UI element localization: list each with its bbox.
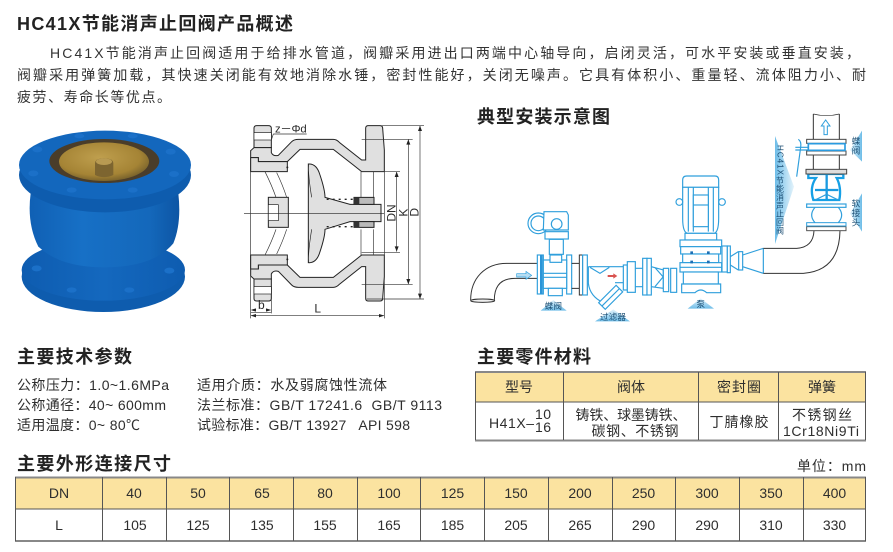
materials table: 碳钢、不锈钢 (592, 423, 678, 439)
values row (55, 517, 846, 533)
materials table: H41X– (489, 415, 534, 431)
component labels: 接 (852, 207, 861, 218)
technical parameters text: 适用温度：0~ 80℃ (17, 417, 140, 433)
component labels: 头 (852, 217, 861, 227)
materials table: 丁腈橡胶 (710, 414, 768, 430)
materials table: 弹簧 (808, 379, 836, 395)
values row: 125 (186, 517, 210, 533)
header row: 50 (190, 485, 206, 501)
values row: 135 (250, 517, 274, 533)
technical parameters text: 适用介质：水及弱腐蚀性流体 (197, 377, 387, 393)
header row: 300 (695, 485, 719, 501)
materials table: 阀体 (617, 379, 645, 395)
component labels: 蝶阀 (545, 300, 562, 311)
dimension labels: K (396, 209, 410, 217)
materials table: 1Cr18Ni9Ti (783, 423, 859, 439)
header row: 80 (317, 485, 333, 501)
values row: 310 (759, 517, 783, 533)
component labels: 泵 (696, 299, 705, 309)
label backgrounds (541, 131, 862, 321)
component labels: 回 (776, 218, 784, 227)
dimensions table (15, 477, 866, 541)
header row: 400 (823, 485, 846, 501)
materials table: 16 (535, 419, 551, 435)
component labels: 阀 (852, 145, 860, 155)
connecting spool and strainer (572, 255, 677, 309)
materials table: 密封圈 (717, 379, 761, 395)
unit note: 单位：mm (797, 458, 866, 474)
vertical run: joint, check valve, butterfly valve, pipe (795, 114, 847, 231)
intro paragraph: HC41X节能消声止回阀适用于给排水管道，阀瓣采用进出口两端中心轴导向，启闭灵活，可水平安装或垂直安装， (50, 45, 860, 61)
hub and shaft (268, 197, 288, 227)
heading: main technical parameters: 主要技术参数 (17, 346, 132, 367)
component labels: 过滤器 (600, 311, 626, 322)
component labels: 阀 (776, 226, 784, 235)
dimension labels: DN (384, 204, 398, 222)
intro paragraph: 疲劳、寿命长等优点。 (17, 89, 171, 105)
technical parameters text: 试验标准：GB/T 13927 API 598 (197, 417, 410, 433)
dimension labels: L (314, 302, 321, 316)
butterfly valve with actuator (528, 212, 572, 296)
valve product photo (19, 131, 191, 312)
body halves (251, 126, 384, 197)
technical parameters text (17, 377, 442, 433)
values row: 290 (632, 517, 655, 533)
header row: 65 (254, 485, 270, 501)
technical parameters text: 公称通径：40~ 600mm (17, 397, 166, 413)
header row: DN (49, 485, 69, 501)
values row: 165 (377, 517, 401, 533)
header row: 100 (377, 485, 401, 501)
component labels: 软 (852, 198, 861, 209)
materials table (475, 372, 866, 440)
intro paragraph (17, 45, 866, 105)
dimension labels: D (408, 208, 422, 217)
vertical pump with motor (676, 176, 725, 293)
component labels: 止 (776, 209, 784, 219)
values row: L (55, 517, 63, 533)
component labels (545, 135, 861, 322)
component labels: 能 (776, 184, 784, 194)
title: HC41X节能消声止回阀产品概述 (17, 13, 293, 34)
values row: 265 (568, 517, 592, 533)
technical parameters text: 法兰标准：GB/T 17241.6 GB/T 9113 (197, 397, 442, 413)
header row: 200 (568, 485, 592, 501)
header row: 40 (126, 485, 142, 501)
component labels: 蝶 (852, 135, 861, 146)
technical parameters text: 公称压力：1.0~1.6MPa (17, 377, 169, 393)
installation schematic (471, 114, 862, 322)
materials table: 10 (535, 406, 551, 422)
intro paragraph: 阀瓣采用弹簧加载，其快速关闭能有效地消除水锤，密封性能好，关闭无噪声。它具有体积小、重量轻、流体阻力小、耐 (17, 67, 866, 83)
values row: 155 (313, 517, 337, 533)
heading: typical installation: 典型安装示意图 (477, 106, 610, 127)
component labels: 消 (776, 192, 784, 202)
header row: 350 (759, 485, 783, 501)
dimension labels (258, 123, 422, 316)
heading: main dimensions: 主要外形连接尺寸 (17, 454, 171, 474)
outlet reducer and elbow (722, 231, 840, 273)
dimension labels: b (258, 298, 265, 312)
values row: 330 (823, 517, 846, 533)
component labels: HC41X (775, 145, 784, 176)
values row: 205 (504, 517, 528, 533)
values row: 290 (695, 517, 719, 533)
header row (49, 485, 846, 501)
dimension lines (251, 126, 424, 318)
values row: 185 (441, 517, 464, 533)
materials table: 铸铁、球墨铸铁、 (576, 407, 686, 423)
header row: 150 (504, 485, 528, 501)
header row: 250 (632, 485, 655, 501)
dimension labels: z－Φd (275, 123, 307, 135)
heading: main parts materials: 主要零件材料 (477, 347, 591, 367)
header row: 125 (441, 485, 464, 501)
materials table: 不锈钢丝 (792, 407, 852, 423)
valve cross-section drawing (244, 123, 424, 318)
materials table: 型号 (505, 379, 533, 395)
inlet elbow pipe (471, 263, 537, 302)
component labels: 节 (776, 176, 784, 185)
values row: 105 (123, 517, 147, 533)
component labels: 声 (776, 200, 784, 210)
